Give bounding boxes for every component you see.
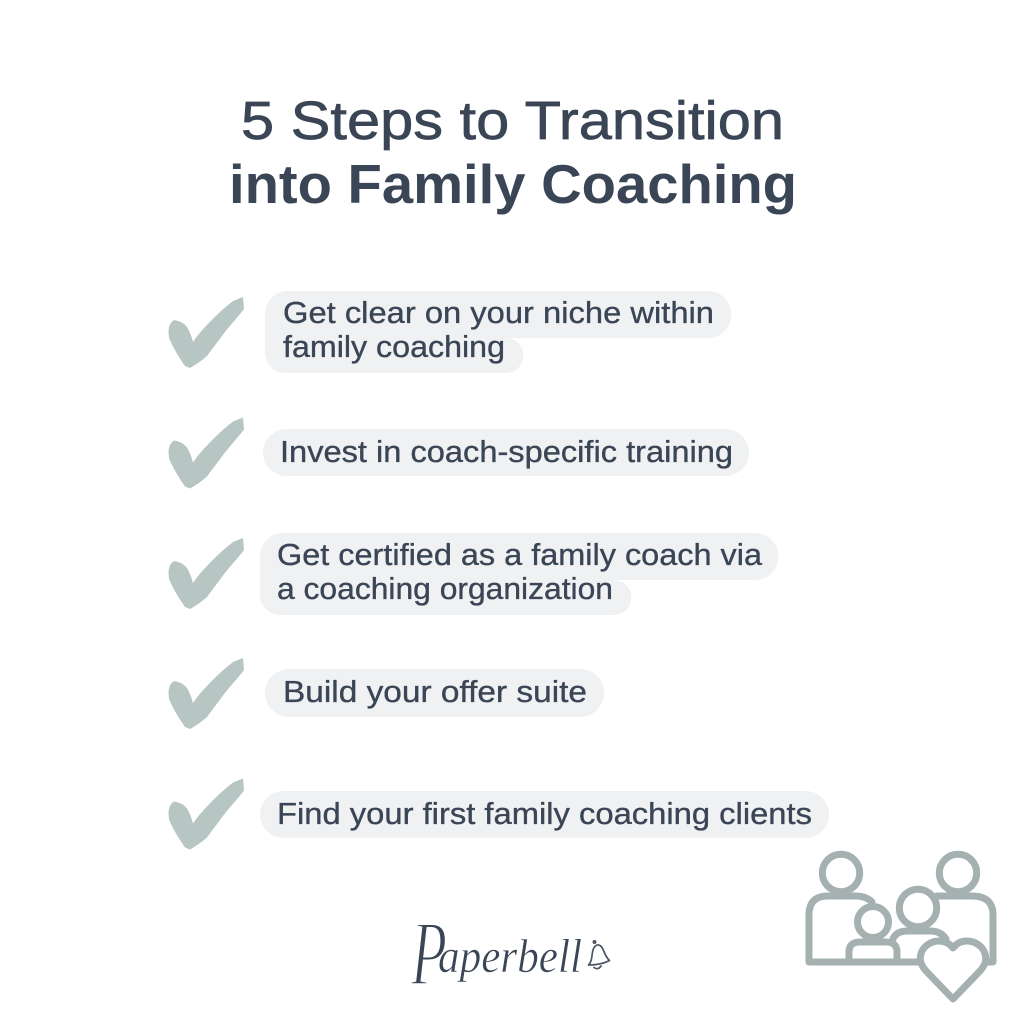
pill 3 [260,533,778,615]
step 3 [168,533,778,615]
logo: Paperbell: P [410,902,447,1004]
step 2 text: Invest in coach-specific training [280,434,733,469]
step 1 text: family coaching [283,329,505,364]
logo: Paperbell: aperbell [438,930,582,983]
checkmark 1 [168,297,244,368]
pill 4 [265,669,604,717]
step 4 [168,658,604,729]
right parent [937,854,993,962]
pill 1 [265,291,732,373]
step 3 text [277,537,763,606]
title: into Family Coaching [229,153,797,215]
step 4 text: Build your offer suite [283,674,587,709]
icon: family with heart [809,854,993,999]
step 5 text: Find your first family coaching clients [277,796,812,831]
step 5 [168,778,829,850]
pill 5 [260,791,829,838]
icon: bell [588,941,610,969]
step 1 [168,291,732,373]
checkmark 5 [168,778,244,850]
younger child [849,906,897,960]
title: 5 Steps to Transition [241,91,784,151]
heart [920,941,986,999]
logo: Paperbell [410,902,610,1004]
step 1 text [283,295,714,364]
checkmark 4 [168,658,244,729]
step 2 [168,418,749,488]
older child [893,889,946,939]
step 1 text: Get clear on your niche within [283,295,714,330]
checkmark 2 [168,418,244,488]
step 3 text: Get certified as a family coach via [277,537,763,572]
title [229,91,797,215]
pill 2 [263,429,749,476]
checkmark 3 [168,538,244,609]
step 3 text: a coaching organization [277,571,613,606]
left parent [809,854,925,962]
